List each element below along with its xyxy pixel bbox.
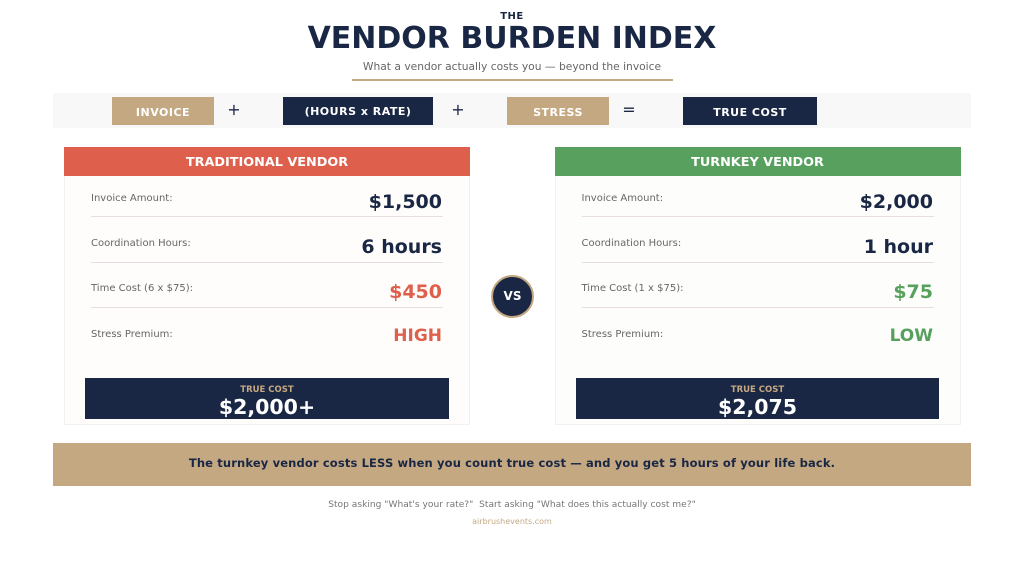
panel header: TURNKEY VENDOR xyxy=(691,155,824,170)
subtitle underline xyxy=(352,79,673,80)
value: time cost: $450 xyxy=(389,281,442,303)
formula: true cost: TRUE COST xyxy=(713,106,787,119)
takeaway banner xyxy=(53,443,971,486)
title block xyxy=(308,11,716,81)
formula: stress xyxy=(507,97,609,125)
value: invoice amount: $1,500 xyxy=(369,191,442,213)
value: coordination hours: 6 hours xyxy=(361,236,442,258)
main title: VENDOR BURDEN INDEX xyxy=(308,21,716,56)
panel header xyxy=(64,147,470,176)
formula: hours x rate: (HOURS x RATE) xyxy=(305,105,411,118)
true cost label: TRUE COST xyxy=(240,385,294,395)
formula: invoice: INVOICE xyxy=(136,106,190,119)
takeaway banner: The turnkey vendor costs LESS when you count true cost — and you get 5 hours of your life back. xyxy=(189,456,835,470)
true cost label: TRUE COST xyxy=(731,385,784,395)
true cost box xyxy=(85,378,448,419)
true cost value: $2,000+ xyxy=(219,395,315,419)
formula bar xyxy=(53,93,971,128)
panel header xyxy=(554,147,960,176)
panel header: TRADITIONAL VENDOR xyxy=(186,155,348,170)
vs badge: VS xyxy=(504,289,521,303)
eyebrow: THE: THE xyxy=(500,11,524,22)
true cost value: $2,075 xyxy=(718,395,797,419)
panel: turnkey vendor xyxy=(554,147,960,425)
value: stress premium: LOW xyxy=(890,326,933,346)
subtitle: What a vendor actually costs you — beyond the invoice xyxy=(363,60,661,73)
label: stress premium: Stress Premium: xyxy=(582,329,663,340)
label: invoice amount: Invoice Amount: xyxy=(91,193,173,204)
label: invoice amount: Invoice Amount: xyxy=(582,193,663,204)
website: airbrushevents.com xyxy=(472,517,552,526)
formula: plus: + xyxy=(451,100,465,119)
formula: stress: STRESS xyxy=(533,106,583,119)
value: coordination hours: 1 hour xyxy=(864,236,933,258)
label: time cost: Time Cost (6 x $75): xyxy=(91,283,193,294)
label: time cost: Time Cost (1 x $75): xyxy=(582,283,683,294)
label: coordination hours: Coordination Hours: xyxy=(582,238,681,249)
formula: invoice xyxy=(112,97,214,125)
formula: true cost xyxy=(683,97,817,125)
label: coordination hours: Coordination Hours: xyxy=(91,238,191,249)
value: invoice amount: $2,000 xyxy=(860,191,933,213)
true cost box xyxy=(576,378,939,419)
value: time cost: $75 xyxy=(893,281,933,303)
vs badge xyxy=(491,275,534,318)
panel: traditional vendor xyxy=(64,147,470,425)
label: stress premium: Stress Premium: xyxy=(91,329,173,340)
formula: hours x rate xyxy=(283,97,433,125)
closing prompt: Stop asking "What's your rate?" Start asking "What does this actually cost me?" xyxy=(328,500,696,510)
formula: plus: + xyxy=(227,100,241,119)
formula: equals: = xyxy=(622,100,636,119)
value: stress premium: HIGH xyxy=(393,326,442,346)
